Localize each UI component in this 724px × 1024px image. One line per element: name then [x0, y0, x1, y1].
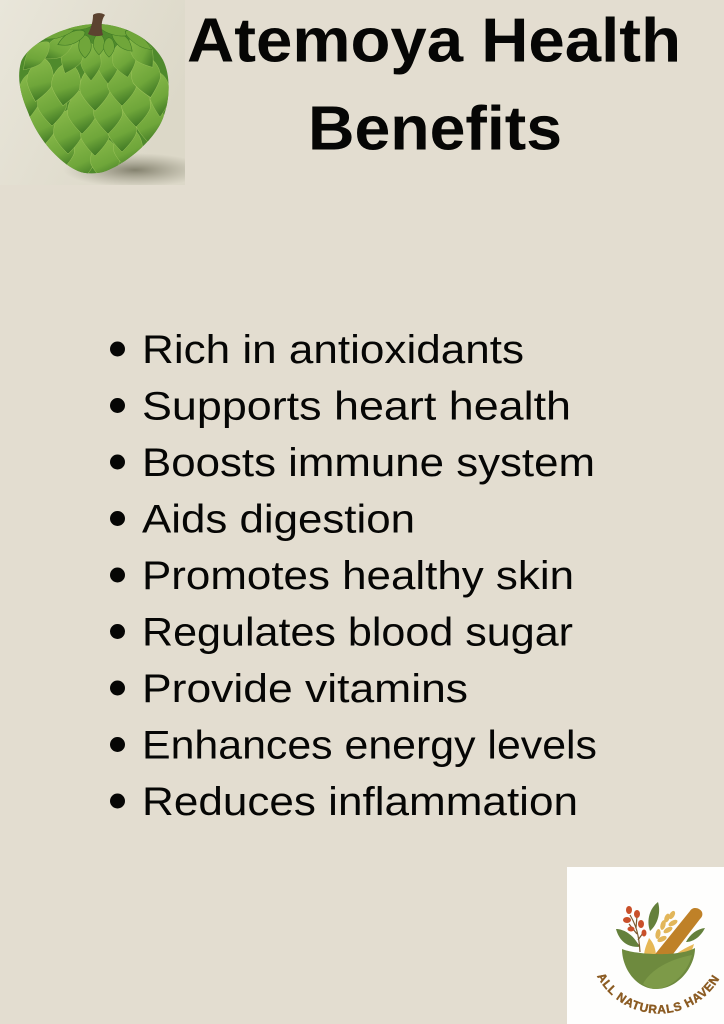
- benefits list: Boosts immune system: [142, 441, 595, 485]
- fruit photo: [0, 0, 185, 185]
- title: [187, 6, 681, 164]
- benefits list: Enhances energy levels: [142, 724, 597, 768]
- logo wordmark: ALL NATURALS HAVEN: [596, 974, 720, 1014]
- icon: pestle: [652, 908, 702, 958]
- icon: leaves: [616, 902, 705, 947]
- benefits list: Provide vitamins: [142, 667, 468, 711]
- logo panel: [567, 867, 724, 1024]
- icon: berry branch: [623, 906, 646, 952]
- logo text arc: [597, 976, 721, 1014]
- icon: stem: [88, 13, 105, 36]
- title: Benefits: [308, 94, 562, 164]
- icon: herbs in bowl: [644, 938, 694, 958]
- benefits list: Supports heart health: [142, 384, 571, 428]
- benefits list: Promotes healthy skin: [142, 554, 574, 598]
- benefits list: Reduces inflammation: [142, 780, 578, 824]
- benefits list: Aids digestion: [142, 498, 415, 542]
- benefits list: [110, 328, 597, 824]
- icon: wheat: [655, 910, 679, 943]
- benefits list: Regulates blood sugar: [142, 610, 573, 654]
- title: Atemoya Health: [187, 6, 681, 76]
- icon: mortar bowl: [622, 948, 695, 989]
- icon: atemoya fruit: [19, 13, 169, 174]
- benefits list: Rich in antioxidants: [142, 328, 524, 372]
